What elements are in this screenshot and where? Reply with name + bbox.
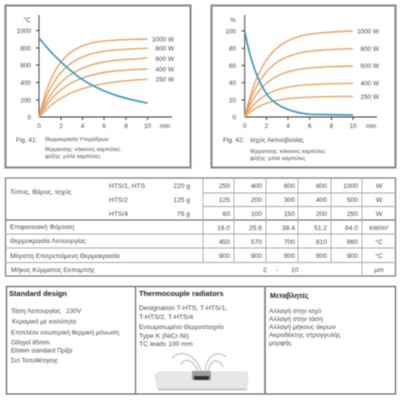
- row: surface load: [217, 225, 389, 232]
- row: power HTS/1: 600: [284, 183, 295, 190]
- power labels: 1000 W: [152, 36, 175, 44]
- row: surface load: 16.0: [217, 225, 230, 232]
- bottom info boxes: [6, 286, 396, 394]
- axis labels: 60: [229, 63, 236, 70]
- row labels: HTS/1, HTS: [109, 183, 146, 190]
- power labels: 600 W: [156, 56, 175, 63]
- row: power HTS/4: [223, 211, 383, 218]
- panel: thermocouple radiators: Type K (NiCr-Ni): [139, 333, 189, 340]
- row: power HTS/4: 200: [316, 211, 327, 218]
- row: maximum temperature: 900: [347, 253, 358, 260]
- row labels: Τύπος, Βάρος, Ισχύς: [10, 188, 72, 196]
- axis labels: 8: [124, 123, 128, 130]
- panel: temperature chart: [6, 6, 190, 168]
- power labels: 1000 W: [357, 28, 380, 36]
- axis labels: 8: [330, 123, 334, 130]
- row: power HTS/1: 800: [316, 183, 327, 190]
- row: power HTS/2: [219, 197, 383, 204]
- power labels: [152, 36, 175, 84]
- chart axes: [36, 15, 172, 120]
- panel: thermocouple radiators: Ενσωματωμένο Θερμοστοιχείο: [139, 324, 224, 331]
- row labels: Επιφανειακή Φόρτιση: [10, 223, 74, 231]
- row: operating temperature: 860: [347, 239, 358, 246]
- row: power HTS/1: 250: [219, 183, 230, 190]
- row: power HTS/4: 250: [347, 211, 358, 218]
- heating curves: [39, 39, 148, 117]
- panel: standard design: Standard design: [9, 289, 67, 298]
- row: power HTS/2: 500: [347, 197, 358, 204]
- caption: Ισχύς Ακτινοβολίας: [250, 136, 304, 144]
- panel: radiation power chart: [212, 6, 396, 168]
- panel: variables: [269, 292, 342, 347]
- row: surface load: 38.4: [282, 225, 295, 232]
- row: wavelength: -: [276, 267, 278, 274]
- panel: thermocouple radiators: [139, 289, 248, 390]
- row: power HTS/4: 60: [223, 211, 230, 218]
- caption: θέρμανσης: κόκκινες καμπύλες: [250, 148, 326, 155]
- caption: Θερμοκρασία Υπερύθρων: [45, 136, 109, 143]
- row: maximum temperature: 900: [316, 253, 327, 260]
- row labels: 125 g: [173, 197, 190, 204]
- axis labels: 0: [243, 123, 247, 130]
- row labels: Θερμοκρασία Λειτουργίας: [10, 237, 87, 245]
- axis labels: 800: [20, 46, 31, 52]
- row: surface load: 51.2: [314, 225, 327, 232]
- axis labels: 80: [229, 46, 236, 52]
- axis labels: 0: [232, 114, 236, 122]
- axis labels: 1000: [17, 28, 31, 35]
- row: operating temperature: °C: [375, 238, 383, 246]
- axis labels: 400: [20, 80, 31, 87]
- axis labels: 100: [225, 28, 236, 36]
- axis labels: min: [366, 123, 377, 130]
- axis labels: 6: [308, 123, 312, 130]
- panel: thermocouple radiators: Thermocouple radiators: [139, 289, 224, 298]
- row: surface load: kW/m²: [369, 225, 389, 232]
- row: maximum temperature: 900: [251, 253, 262, 260]
- row: surface load: 25.6: [249, 225, 262, 232]
- row: power HTS/4: 100: [251, 211, 262, 218]
- axis labels: 4: [286, 123, 290, 130]
- row: operating temperature: 570: [251, 239, 262, 246]
- row labels: Μήκος Κύμματος Εκπομπής: [11, 266, 96, 274]
- power labels: 600 W: [361, 63, 380, 70]
- row: power HTS/1: W: [376, 183, 383, 190]
- panel: thermocouple radiators: TC leads 100 mm: [139, 341, 193, 348]
- caption: [16, 136, 121, 160]
- row labels: 220 g: [173, 183, 190, 190]
- caption: [223, 136, 326, 162]
- row: operating temperature: 810: [316, 239, 327, 246]
- row: power HTS/4: W: [376, 211, 383, 218]
- row: wavelength: 2: [263, 267, 267, 274]
- panel: variables: μορφής: [269, 340, 292, 347]
- row: operating temperature: 450: [219, 239, 230, 246]
- table grid: [5, 178, 396, 276]
- panel: thermocouple radiators: Designation T-HTS, T-HTS/1,: [139, 305, 227, 312]
- panel: standard design: Σετ Τοποθέτησης: [11, 358, 58, 364]
- panel: standard design: Επιπλέον εσωτερική θερμική μόνωση: [11, 328, 120, 336]
- row: wavelength: [263, 267, 384, 274]
- panel: variables: Ακροδέκτης στρογγυλής: [269, 331, 342, 339]
- power labels: 800 W: [361, 46, 380, 53]
- row: power HTS/1: [219, 183, 383, 190]
- row: power HTS/2: 400: [316, 197, 327, 204]
- row labels: HTS/2: [109, 197, 128, 204]
- caption: ψύξης: μπλέ καμπύλες: [45, 153, 101, 160]
- axis labels: 600: [20, 62, 31, 70]
- caption: Fig. 42:: [223, 137, 245, 144]
- row: power HTS/2: 125: [219, 197, 230, 204]
- row: power HTS/2: 200: [251, 197, 262, 204]
- power labels: 800 W: [156, 46, 175, 52]
- panel: standard design: Κεραμικό με κοιλότητα: [12, 318, 76, 326]
- panel: variables: Μεταβλητές: [270, 292, 309, 300]
- power labels: 400 W: [361, 80, 380, 88]
- panel: variables: Αλλαγή μήκους άκρων: [269, 323, 336, 331]
- row: power HTS/2: 300: [284, 197, 295, 204]
- row labels: 75 g: [177, 211, 190, 218]
- axis labels: 200: [20, 98, 31, 104]
- axis labels: 0: [37, 123, 41, 130]
- axis labels: 2: [59, 123, 63, 130]
- panel: standard design: Οδηγοί 85mm: [11, 340, 50, 346]
- axis labels: 4: [81, 123, 85, 130]
- axis labels: min: [160, 123, 171, 130]
- power labels: 250 W: [156, 76, 175, 84]
- row: power HTS/1: 400: [251, 183, 262, 190]
- panel: thermocouple radiators: T-HTS/2, T-HTS/4: [139, 314, 193, 321]
- row: power HTS/2: W: [376, 197, 383, 204]
- chart axes: [242, 15, 377, 120]
- panel: variables: Αλλαγή στην τάση: [269, 315, 323, 323]
- panel: standard design: Elstein standard Πρίζα: [11, 348, 73, 354]
- caption: Fig. 41:: [16, 137, 38, 144]
- axis labels: 6: [102, 123, 106, 130]
- row labels: Μέγιστη Επιτρεπόμενη Θερμοκρασία: [10, 252, 120, 260]
- row labels: HTS/4: [109, 211, 128, 218]
- heating curves: [245, 31, 353, 117]
- axis labels: 10: [349, 123, 357, 130]
- panel: standard design: [9, 289, 120, 364]
- power labels: [357, 28, 380, 101]
- panel: standard design: Τάση Λειτουργίας 230V: [11, 307, 82, 315]
- row: maximum temperature: °C: [375, 252, 383, 260]
- icon: radiator with thermocouple leads: [155, 354, 248, 390]
- row: surface load: 64.0: [345, 225, 358, 232]
- row: maximum temperature: 900: [284, 253, 295, 260]
- caption: θέρμανσης: κόκκινες καμπύλες: [45, 146, 121, 153]
- axis labels: [225, 17, 377, 130]
- caption: ψύξης: μπλέ καμπύλες: [250, 155, 306, 162]
- specification table: [5, 178, 396, 276]
- axis labels: 2: [265, 123, 269, 130]
- axis labels: [17, 16, 171, 130]
- axis labels: %: [230, 17, 236, 24]
- panel: variables: Αλλαγή στην ισχύ: [269, 307, 322, 315]
- power labels: 400 W: [156, 66, 175, 74]
- axis labels: 10: [144, 123, 151, 130]
- cooling curve: [39, 38, 148, 103]
- row: operating temperature: 700: [284, 239, 295, 246]
- power labels: 250 W: [361, 94, 380, 101]
- row: maximum temperature: 900: [219, 253, 230, 260]
- row: wavelength: μm: [374, 267, 384, 274]
- axis labels: °C: [23, 16, 31, 24]
- row: maximum temperature: [219, 252, 383, 260]
- cooling curve: [245, 31, 353, 115]
- row labels: [10, 183, 190, 274]
- row: power HTS/1: 1000: [343, 183, 358, 190]
- axis labels: 40: [229, 80, 236, 87]
- row: wavelength: 10: [291, 267, 299, 274]
- row: operating temperature: [219, 238, 383, 246]
- axis labels: 20: [229, 98, 236, 104]
- row: power HTS/4: 150: [284, 211, 295, 218]
- axis labels: 0: [27, 114, 31, 122]
